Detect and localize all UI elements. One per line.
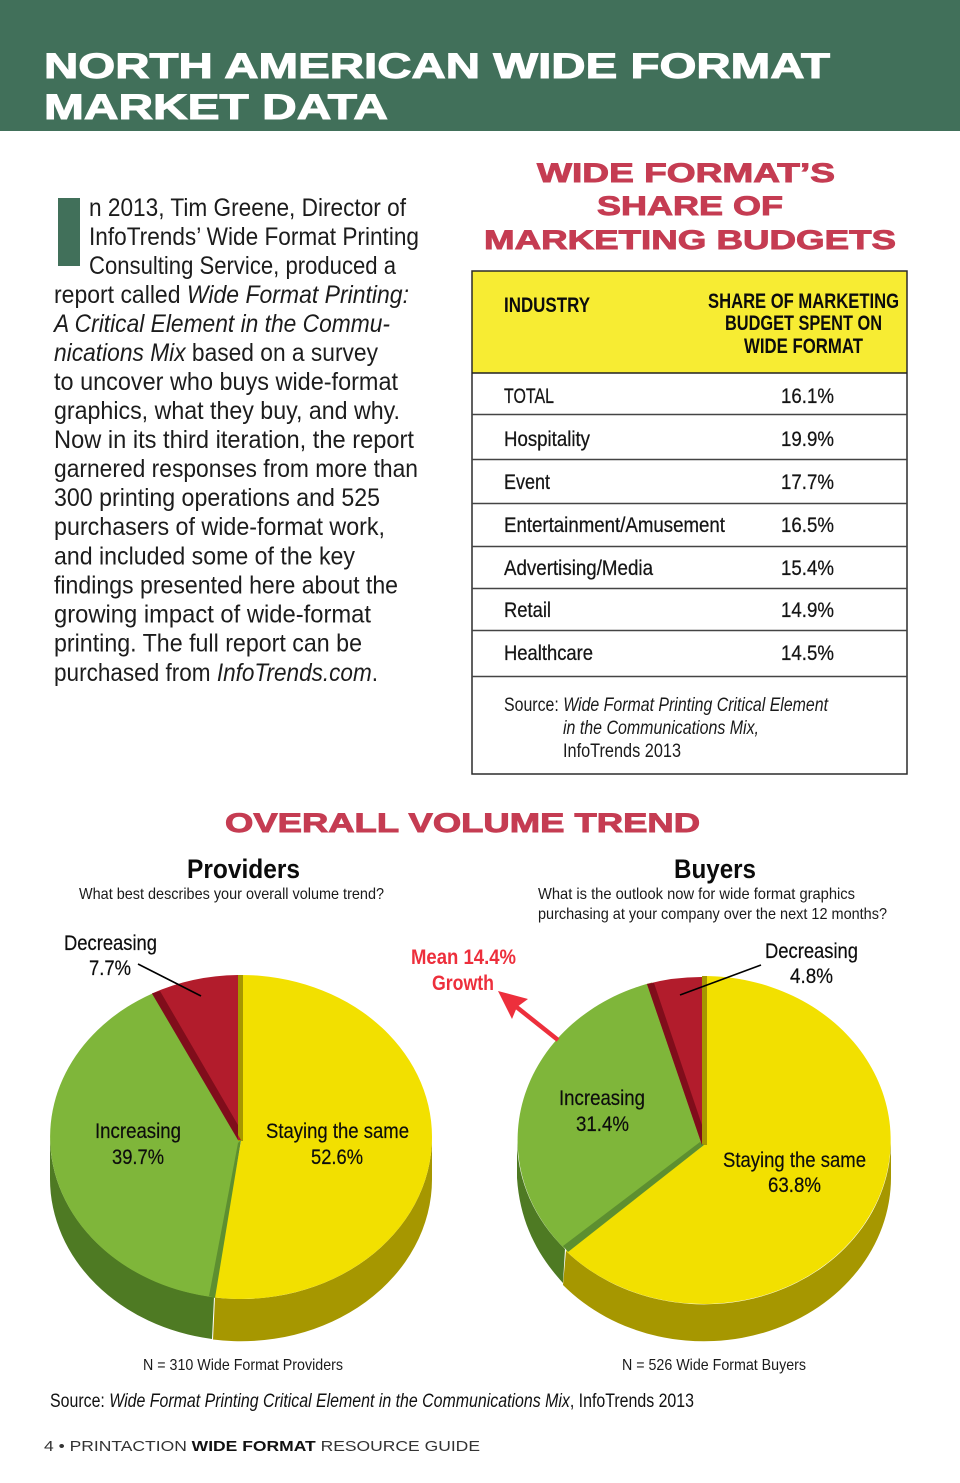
intro text block: 300 printing operations and 525	[54, 484, 380, 512]
label: staying the same: Staying the same	[266, 1120, 409, 1143]
label: decreasing: 4.8%	[790, 965, 833, 988]
label: staying the same: 63.8%	[768, 1174, 821, 1197]
table header: INDUSTRY	[504, 294, 590, 317]
providers heading: What best describes your overall volume trend?	[79, 886, 384, 903]
intro text block: and included some of the key	[54, 542, 355, 570]
intro text block: purchased from InfoTrends.com.	[54, 659, 378, 687]
drop cap bar	[58, 198, 80, 266]
intro text block: Now in its third iteration, the report	[54, 426, 414, 454]
label: decreasing: Decreasing	[765, 940, 858, 963]
intro text block: report called Wide Format Printing:	[54, 281, 409, 309]
providers heading: Providers	[187, 854, 300, 884]
label: increasing: 39.7%	[112, 1146, 164, 1169]
intro text block: purchasers of wide-format work,	[54, 513, 385, 541]
intro text block	[52, 194, 419, 687]
table header	[472, 271, 907, 373]
arrow: growth	[498, 991, 558, 1040]
row: retail	[504, 599, 834, 622]
pie chart: providers	[50, 932, 432, 1341]
side: yellow	[563, 1140, 891, 1341]
slice: decreasing	[152, 975, 241, 1140]
side: green	[50, 1137, 214, 1339]
slice: staying the same	[213, 975, 432, 1299]
callout: mean growth: Mean 14.4%	[411, 946, 516, 969]
row: event: Event	[504, 471, 550, 494]
title	[44, 47, 830, 127]
row: total	[504, 385, 834, 408]
label: increasing: Increasing	[95, 1120, 181, 1143]
row: total: TOTAL	[504, 385, 554, 408]
pie chart: buyers	[517, 940, 891, 1341]
table header: SHARE OF MARKETING	[708, 290, 899, 313]
row: entertainment: 16.5%	[781, 514, 834, 537]
heading: wide format's share of marketing budgets	[484, 158, 896, 255]
heading: wide format's share of marketing budgets: SHARE OF	[597, 191, 783, 221]
note: providers sample: N = 310 Wide Format Providers	[143, 1357, 343, 1374]
table source: in the Communications Mix,	[563, 718, 759, 739]
label: increasing	[95, 1120, 181, 1169]
row: event	[504, 471, 834, 494]
label: staying the same: Staying the same	[723, 1149, 866, 1172]
label: increasing: Increasing	[559, 1087, 645, 1110]
buyers heading: What is the outlook now for wide format graphics	[538, 886, 855, 903]
leader line	[680, 965, 761, 995]
row: retail: Retail	[504, 599, 551, 622]
label: decreasing	[765, 940, 858, 988]
row: advertising	[504, 557, 834, 580]
side: green	[517, 1140, 565, 1283]
table source	[504, 695, 829, 762]
row: entertainment: Entertainment/Amusement	[504, 514, 725, 537]
row: total: 16.1%	[781, 385, 834, 408]
title: MARKET DATA	[44, 88, 388, 127]
row: healthcare: 14.5%	[781, 642, 834, 665]
table header: BUDGET SPENT ON	[725, 312, 882, 335]
intro text block: growing impact of wide-format	[54, 600, 371, 628]
slice: staying the same	[566, 976, 891, 1304]
label: decreasing: 7.7%	[89, 957, 131, 980]
intro text block: nications Mix based on a survey	[54, 339, 378, 367]
slice: increasing	[50, 991, 241, 1297]
table source: Source: Wide Format Printing Critical Element	[504, 695, 829, 716]
intro text block: findings presented here about the	[54, 572, 398, 600]
row: advertising: 15.4%	[781, 557, 834, 580]
slice: decreasing	[647, 977, 702, 1145]
providers heading	[79, 854, 384, 903]
label: increasing: 31.4%	[576, 1113, 629, 1136]
table source: InfoTrends 2013	[563, 741, 681, 762]
intro text block: to uncover who buys wide-format	[54, 368, 398, 396]
row: advertising: Advertising/Media	[504, 557, 653, 580]
callout: mean growth	[411, 946, 516, 995]
row: healthcare: Healthcare	[504, 642, 593, 665]
header banner	[0, 0, 960, 131]
heading: overall volume trend: OVERALL VOLUME TREND	[225, 808, 700, 838]
row: healthcare	[504, 642, 834, 665]
slice: increasing	[518, 982, 704, 1248]
row: hospitality	[504, 428, 834, 451]
label: increasing	[559, 1087, 645, 1136]
intro text block: A Critical Element in the Commu-	[52, 310, 390, 338]
title: NORTH AMERICAN WIDE FORMAT	[44, 47, 830, 86]
buyers heading: Buyers	[674, 854, 756, 884]
chart source: Source: Wide Format Printing Critical Element in the Communications Mix, InfoTrends 2013	[50, 1391, 694, 1412]
heading: wide format's share of marketing budgets: WIDE FORMAT’S	[537, 158, 835, 188]
table header: WIDE FORMAT	[744, 335, 863, 358]
intro text block: graphics, what they buy, and why.	[54, 397, 400, 425]
leader line	[138, 964, 201, 996]
buyers heading: purchasing at your company over the next 12 months?	[538, 906, 887, 923]
buyers heading	[538, 854, 887, 923]
callout: mean growth: Growth	[432, 972, 494, 995]
label: staying the same: 52.6%	[311, 1146, 363, 1169]
note: buyers sample: N = 526 Wide Format Buyers	[622, 1357, 806, 1374]
table: share of marketing budgets	[472, 271, 907, 774]
intro text block: InfoTrends’ Wide Format Printing	[89, 223, 419, 251]
intro text block: garnered responses from more than	[54, 455, 418, 483]
intro text block: Consulting Service, produced a	[89, 252, 396, 280]
side: yellow	[213, 1137, 432, 1341]
row: event: 17.7%	[781, 471, 834, 494]
label: staying the same	[266, 1120, 409, 1169]
label: decreasing: Decreasing	[64, 932, 157, 955]
label: decreasing	[64, 932, 157, 980]
row: retail: 14.9%	[781, 599, 834, 622]
row: hospitality: Hospitality	[504, 428, 590, 451]
row: hospitality: 19.9%	[781, 428, 834, 451]
footer: 4 • PRINTACTION WIDE FORMAT RESOURCE GUIDE	[44, 1438, 480, 1455]
heading: wide format's share of marketing budgets: MARKETING BUDGETS	[484, 225, 896, 255]
label: staying the same	[723, 1149, 866, 1197]
intro text block: printing. The full report can be	[54, 630, 362, 658]
intro text block: n 2013, Tim Greene, Director of	[89, 194, 406, 222]
